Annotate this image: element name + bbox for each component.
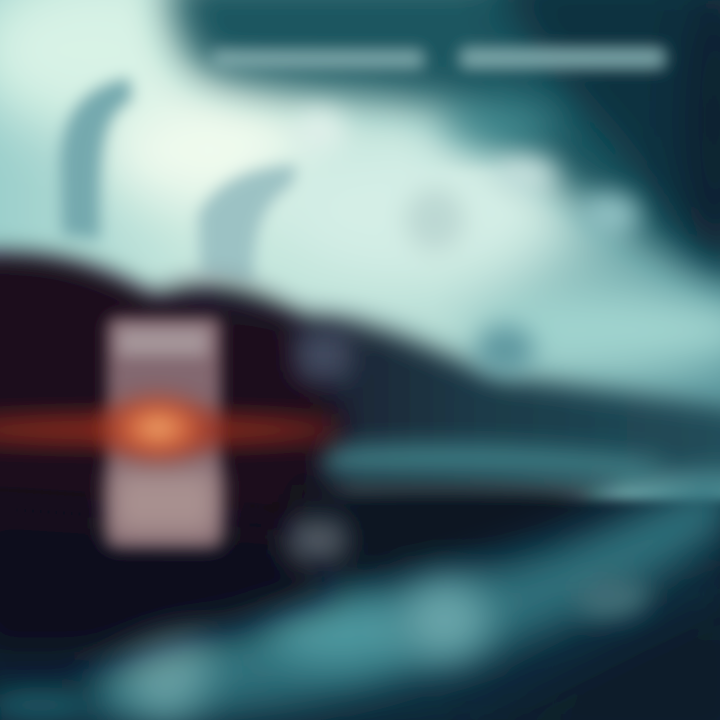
smoke plumes [60, 78, 640, 280]
pale panels [108, 318, 535, 560]
dark hills [0, 256, 720, 650]
title bars [212, 48, 665, 68]
red glow [0, 384, 340, 472]
sky [0, 0, 720, 500]
dark storm clouds [170, 0, 720, 280]
water and shore [0, 444, 720, 720]
